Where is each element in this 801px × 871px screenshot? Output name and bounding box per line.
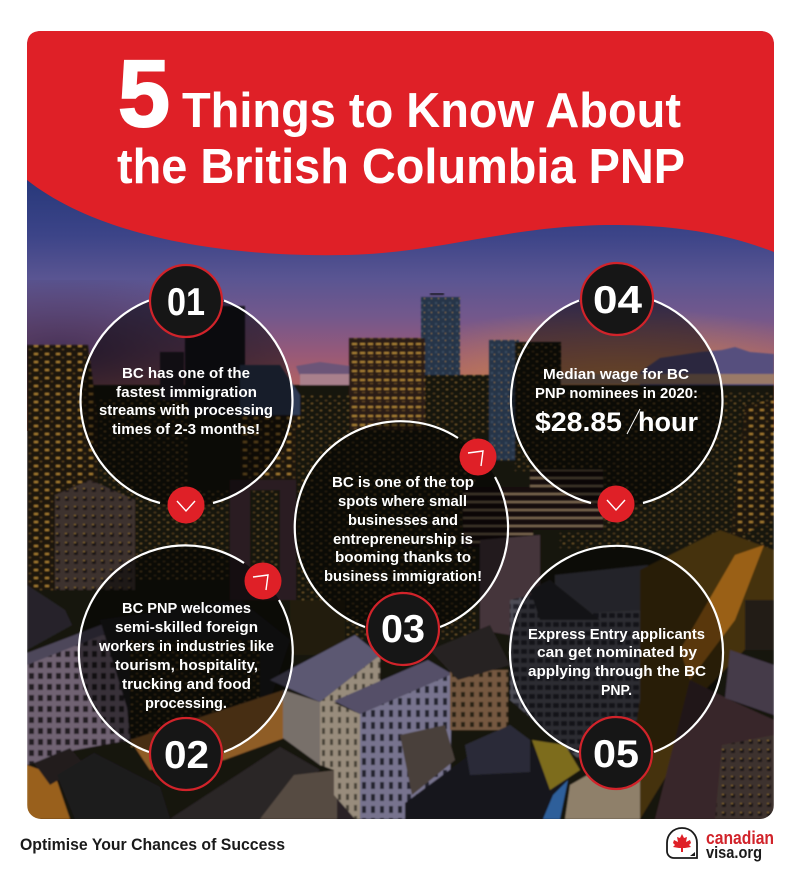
mountains: [640, 347, 774, 385]
panel: item 05: [510, 546, 723, 789]
far towers: [420, 296, 461, 376]
first title line: Things to Know About: [182, 84, 681, 138]
text: item 03: spots where small: [338, 493, 467, 510]
text: item 05: PNP.: [601, 682, 632, 699]
figure: median wage: $28.85: [535, 407, 622, 437]
figure: median wage: hour: [638, 407, 698, 437]
text: item 03: [324, 474, 482, 585]
text: item 03: businesses and: [348, 512, 458, 529]
badge: 03: [367, 593, 439, 665]
text: item 05: Express Entry applicants: [528, 626, 705, 643]
text: item 02: BC PNP welcomes: [122, 600, 251, 617]
lilac building: [334, 660, 452, 714]
text: item 04: [535, 366, 698, 402]
right buildings: [655, 680, 774, 819]
badge: 04: 04: [593, 279, 642, 322]
text: item 03: BC is one of the top: [332, 474, 474, 491]
title heading: [117, 41, 685, 194]
orange street frontage: [130, 690, 287, 770]
panel: item 04: [510, 263, 722, 522]
text: item 01: BC has one of the: [122, 365, 250, 382]
text: item 02: processing.: [145, 695, 227, 712]
title banner: red wave: [27, 31, 774, 255]
amber street: [636, 530, 774, 818]
text: item 05: applying through the BC: [528, 663, 706, 680]
text: item 05: [528, 626, 706, 699]
text: item 02: [98, 600, 274, 712]
text: item 02: tourism, hospitality,: [115, 657, 258, 674]
arrow: down to item 05: [598, 486, 634, 522]
dark rooftops: [34, 748, 84, 785]
text: item 05: can get nominated by: [537, 644, 698, 661]
icon: maple leaf speech bubble: [667, 828, 697, 858]
text: item 04: PNP nominees in 2020:: [535, 385, 698, 402]
badge: 02: [150, 718, 222, 790]
logo: canadianvisa.org: [667, 828, 774, 862]
text: item 01: [99, 365, 273, 438]
far-left lower rooftop and lilac facade: [27, 585, 72, 650]
text: item 03: business immigration!: [324, 568, 482, 585]
badge: 01: [150, 265, 222, 337]
grey office building: [508, 595, 641, 760]
arrow: up-right from item 03: [460, 438, 496, 476]
text: item 03: booming thanks to: [335, 549, 471, 566]
figure: median wage: [535, 407, 698, 437]
panel: item 03: [295, 421, 508, 665]
panel: item 01: [80, 265, 293, 524]
text: item 02: semi-skilled foreign: [115, 619, 258, 636]
badge: 03: 03: [381, 608, 425, 651]
cream building: [270, 635, 380, 702]
black roof foreground: [405, 747, 567, 819]
panel: item 02: [79, 545, 293, 790]
arrow: up-right to item 03: [244, 562, 282, 600]
badge: 05: [580, 717, 652, 789]
logo: canadianvisa.org: visa.org: [706, 843, 762, 862]
badge: 05: 05: [593, 733, 639, 776]
text: item 04: Median wage for BC: [543, 366, 689, 383]
badge: 04: [581, 263, 653, 335]
second title line: the British Columbia PNP: [117, 140, 685, 194]
base of the city: [27, 385, 774, 825]
text: item 02: workers in industries like: [98, 638, 274, 655]
wordmark: canadian: [706, 828, 774, 848]
lower centre office: [296, 430, 476, 640]
text: item 02: trucking and food: [122, 676, 251, 693]
arrow: down to item 02: [168, 486, 204, 524]
text: item 01: fastest immigration: [116, 384, 257, 401]
text: item 03: entrepreneurship is: [333, 531, 473, 548]
left mid buildings: [28, 520, 54, 591]
text: item 01: streams with processing: [99, 402, 273, 419]
footer tagline: Optimise Your Chances of Success: [20, 835, 285, 854]
text: item 01: times of 2-3 months!: [112, 421, 260, 438]
badge: 01: 01: [167, 281, 205, 324]
tan building: [450, 670, 508, 730]
badge: 02: 02: [164, 734, 209, 777]
numeral 5: 5: [118, 41, 170, 147]
